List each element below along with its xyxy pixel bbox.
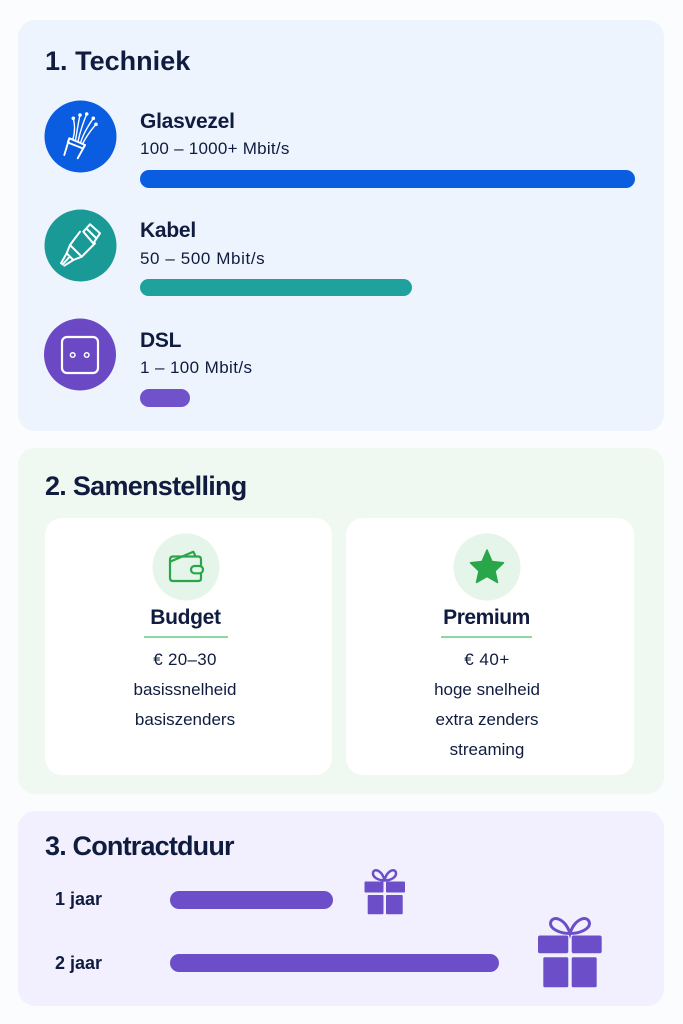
label: 2 jaar: 2 jaar [55,953,102,973]
bar: glasvezel [140,170,635,188]
label: Kabel: Kabel [140,219,196,242]
list: budget [133,650,236,729]
panel: contractduur [18,811,664,1006]
label: DSL: DSL [140,329,181,352]
text: snelheid kabel: 50 – 500 Mbit/s [140,249,265,268]
feature: basissnelheid [133,680,236,699]
bar: kabel [140,279,412,296]
heading: 2. Samenstelling: 2. Samenstelling [45,471,247,501]
icon: glasvezel [44,100,116,172]
divider: premium [441,636,532,638]
feature: streaming [450,740,524,759]
icon: star [454,534,520,600]
feature: hoge snelheid [434,680,540,699]
label: Glasvezel: Glasvezel [140,110,235,133]
icon: small gift [364,869,405,914]
card: premium [346,518,634,775]
price: € 40+ [464,650,510,669]
bar: DSL [140,389,190,407]
label: 1 jaar: 1 jaar [55,889,102,909]
bar: 2 jaar [170,954,499,972]
panel: samenstelling [18,448,664,794]
text: snelheid DSL: 1 – 100 Mbit/s [140,358,252,377]
divider: budget [144,636,228,638]
bar: 1 jaar [170,891,333,909]
text: snelheid glasvezel: 100 – 1000+ Mbit/s [140,139,290,158]
list: premium [434,650,540,759]
icon: large gift [538,917,602,988]
feature: extra zenders [436,710,538,729]
card: budget [45,518,332,775]
heading: 3. Contractduur: 3. Contractduur [45,831,234,861]
icon: DSL [44,318,116,390]
heading: 1. Techniek: 1. Techniek [45,46,190,76]
icon: wallet [152,534,220,600]
icon: kabel [44,210,116,282]
title: Budget: Budget [150,606,221,629]
price: € 20–30 [153,650,217,669]
panel: techniek [18,20,664,431]
feature: basiszenders [135,710,235,729]
title: Premium: Premium [443,606,530,629]
